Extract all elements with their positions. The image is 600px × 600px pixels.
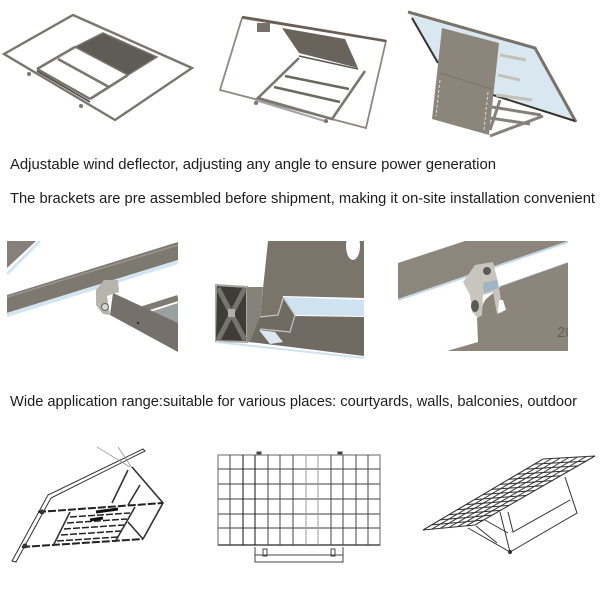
text: wind deflector: Adjustable wind deflector, adjusting any angle to ensure power generation <box>10 157 496 173</box>
image: hinge detail one <box>7 241 178 352</box>
line drawing: tilted panel on bracket <box>423 456 595 554</box>
text: engraved number: 20 <box>557 324 574 341</box>
image: tube end detail <box>215 232 364 358</box>
line drawing: front grid <box>218 452 380 562</box>
text: pre assembled: The brackets are pre assembled before shipment, making it on-site installation convenient <box>10 191 595 207</box>
image: flat bracket frame with deflector <box>4 15 192 120</box>
text: application range: Wide application range:suitable for various places: courtyards, walls, balconies, outdoor <box>10 394 577 410</box>
image: hinge detail two <box>398 241 574 351</box>
image: frame with raised deflector <box>220 17 386 128</box>
image: bracket from behind with solar panel <box>408 12 576 136</box>
line drawing: bracket frame <box>12 447 163 562</box>
